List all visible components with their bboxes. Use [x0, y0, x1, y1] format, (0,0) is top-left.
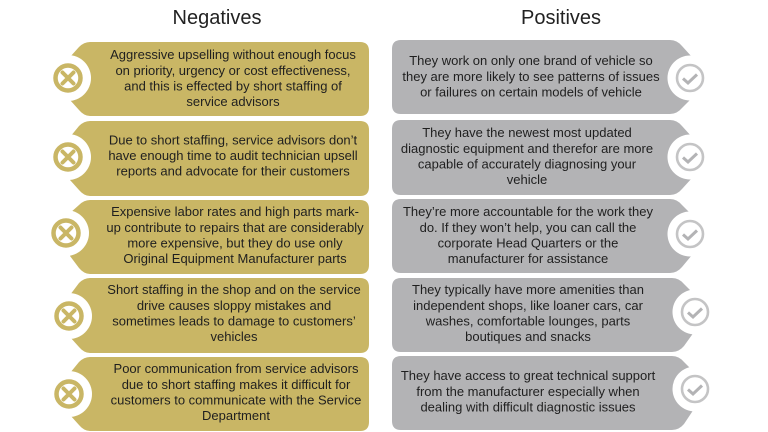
panel: positive 3	[392, 199, 712, 273]
text: manufacturer for assistance	[448, 251, 608, 266]
icon: cross	[56, 304, 82, 328]
text: capable of accurately diagnosing your	[418, 156, 637, 172]
text: They typically have more amenities than	[412, 282, 644, 297]
text: Short staffing in the shop and on the service	[107, 282, 361, 297]
text: Aggressive upselling without enough focus	[110, 47, 356, 62]
text: up contribute to repairs that are considerably	[106, 220, 364, 235]
text: do. If they won’t help, you can call the	[420, 220, 636, 235]
icon: check	[677, 221, 703, 247]
panel: positive 2	[392, 120, 712, 195]
text: reports and advocate for their customers	[116, 164, 350, 178]
panel: positive 5	[392, 356, 718, 430]
heading: Positives: Positives	[521, 7, 601, 29]
panel: positive 1	[392, 40, 712, 114]
text: vehicle	[507, 172, 547, 187]
panel: negative 1	[45, 42, 369, 116]
text: they are more likely to see patterns of issues	[402, 69, 660, 84]
text: boutiques and snacks	[465, 329, 591, 344]
text: from the manufacturer especially when	[416, 384, 640, 399]
heading: Negatives: Negatives	[173, 7, 261, 29]
icon: check	[682, 376, 708, 402]
text: or failures on certain models of vehicle	[420, 84, 642, 100]
text: drive causes sloppy mistakes and	[137, 298, 331, 313]
icon: cross	[54, 220, 78, 246]
text: Due to short staffing, service advisors don’t	[109, 132, 358, 148]
text: They have access to great technical support	[401, 368, 656, 383]
panel: negative 2	[45, 121, 369, 196]
text: customers to communicate with the Service	[111, 392, 361, 408]
icon: cross	[56, 382, 82, 406]
icon: check	[677, 65, 703, 91]
icon: check	[682, 299, 708, 325]
text: vehicles	[211, 329, 258, 344]
icon: check	[677, 144, 703, 170]
text: washes, comfortable lounges, parts	[425, 314, 631, 328]
text: Department	[202, 408, 270, 423]
text: Original Equipment Manufacturer parts	[123, 251, 347, 266]
panel: negative 3	[43, 200, 369, 274]
text: Poor communication from service advisors	[114, 361, 359, 376]
panel: negative 5	[46, 357, 369, 431]
text: dealing with difficult diagnostic issues	[420, 400, 636, 414]
text: They work on only one brand of vehicle so	[409, 53, 653, 68]
text: on priority, urgency or cost effectiveness,	[115, 63, 351, 78]
panel: negative 4	[46, 278, 369, 353]
text: due to short staffing makes it difficult for	[122, 377, 351, 392]
text: independent shops, like loaner cars, car	[413, 298, 644, 313]
text: and this is effected by short staffing of	[124, 78, 342, 94]
text: They’re more accountable for the work they	[403, 204, 654, 219]
text: service advisors	[186, 94, 280, 109]
icon: cross	[56, 144, 80, 170]
icon: cross	[56, 66, 80, 90]
text: corporate Head Quarters or the	[438, 236, 618, 250]
text: more expensive, but they do use only	[127, 236, 343, 250]
text: diagnostic equipment and therefor are more	[401, 141, 653, 156]
text: sometimes leads to damage to customers’	[112, 314, 356, 328]
text: They have the newest most updated	[422, 125, 632, 140]
panel: positive 4	[392, 278, 718, 352]
text: have enough time to audit technician upsell	[108, 148, 358, 163]
text: Expensive labor rates and high parts mark-	[111, 204, 359, 219]
